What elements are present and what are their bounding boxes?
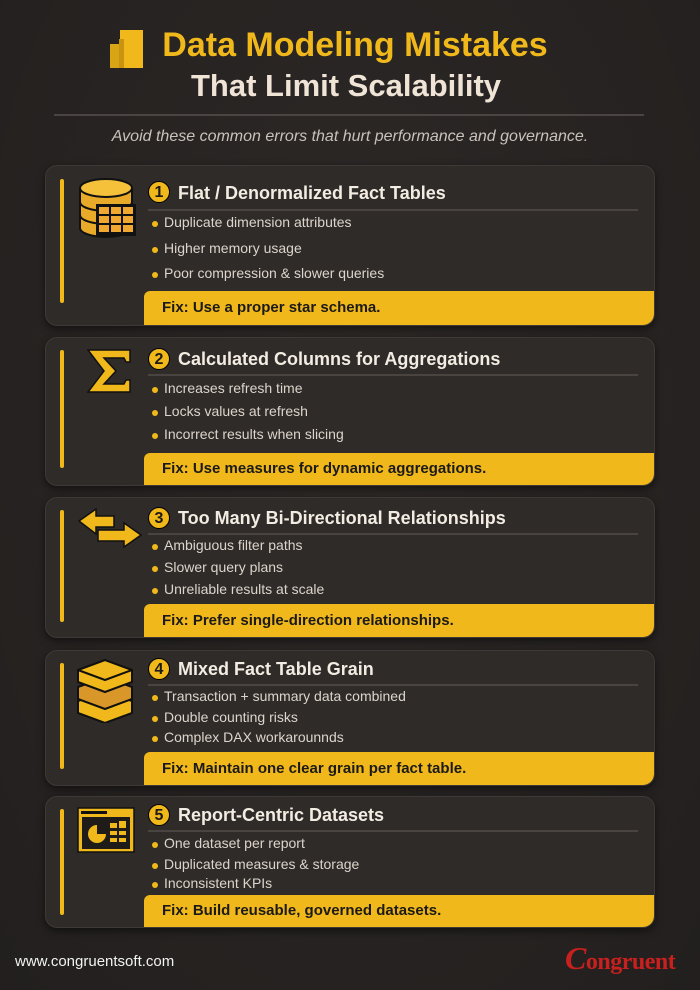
panel: 2: Locks values at refresh: [164, 403, 308, 419]
heading: [148, 181, 170, 203]
text: Data Modeling Mistakes: [162, 26, 548, 64]
fix: [144, 752, 654, 785]
panel: 1: Flat / Denormalized Fact Tables: [178, 183, 446, 203]
heading: 2: [155, 351, 163, 368]
panel: 4: Complex DAX workarounnds: [164, 729, 344, 745]
fix: Fix: Prefer single-direction relationships.: [162, 612, 454, 629]
panel: 4: [45, 650, 655, 786]
bullets: Ambiguous filter paths: [164, 537, 303, 553]
icon: layers: [77, 659, 133, 723]
icon: report: [77, 807, 135, 853]
heading: 1: [155, 184, 163, 201]
heading: 3: [155, 510, 163, 527]
title icon: [110, 30, 143, 68]
subtitle: Avoid these common errors that hurt performance and governance.: [112, 128, 588, 145]
fix: Fix: Build reusable, governed datasets.: [162, 902, 441, 919]
icon: database: [79, 178, 136, 238]
fix: Fix: Use a proper star schema.: [162, 299, 380, 316]
title: [162, 26, 548, 103]
icon: arrows: [78, 508, 142, 548]
footer url: www.congruentsoft.com: [15, 953, 174, 970]
text: That Limit Scalability: [191, 68, 501, 103]
fix: [144, 895, 654, 927]
fix: [144, 453, 654, 485]
panel: 3: Slower query plans: [164, 559, 283, 575]
bullets: Duplicate dimension attributes: [164, 214, 352, 230]
panel: 1: Poor compression & slower queries: [164, 265, 384, 281]
fix: Fix: Maintain one clear grain per fact table.: [162, 760, 466, 777]
heading: [148, 804, 170, 826]
heading: [148, 348, 170, 370]
logo: Congruent: [565, 940, 675, 976]
icon: sigma: [86, 349, 131, 393]
panel: 2: [45, 337, 655, 486]
fix: [144, 291, 654, 325]
panel: 3: Too Many Bi-Directional Relationships: [178, 508, 506, 528]
bullets: Transaction + summary data combined: [164, 688, 406, 704]
heading: [148, 507, 170, 529]
fix: Fix: Use measures for dynamic aggregations.: [162, 460, 486, 477]
panel: 1: Higher memory usage: [164, 240, 302, 256]
heading: [148, 658, 170, 680]
panel: 3: [45, 497, 655, 638]
panel: 2: Calculated Columns for Aggregations: [178, 349, 500, 369]
panel: 3: Unreliable results at scale: [164, 581, 324, 597]
panel: 5: Inconsistent KPIs: [164, 875, 272, 891]
heading: 5: [155, 807, 163, 824]
panel: 2: Incorrect results when slicing: [164, 426, 344, 442]
panel: 5: Report-Centric Datasets: [178, 805, 384, 825]
panel: 1: [45, 165, 655, 326]
panel: 5: Duplicated measures & storage: [164, 856, 359, 872]
bullets: Increases refresh time: [164, 380, 302, 396]
panel: 5: [45, 796, 655, 928]
panel: 4: Mixed Fact Table Grain: [178, 659, 374, 679]
panel: 4: Double counting risks: [164, 709, 298, 725]
bullets: One dataset per report: [164, 835, 305, 851]
fix: [144, 604, 654, 637]
heading: 4: [155, 661, 163, 678]
